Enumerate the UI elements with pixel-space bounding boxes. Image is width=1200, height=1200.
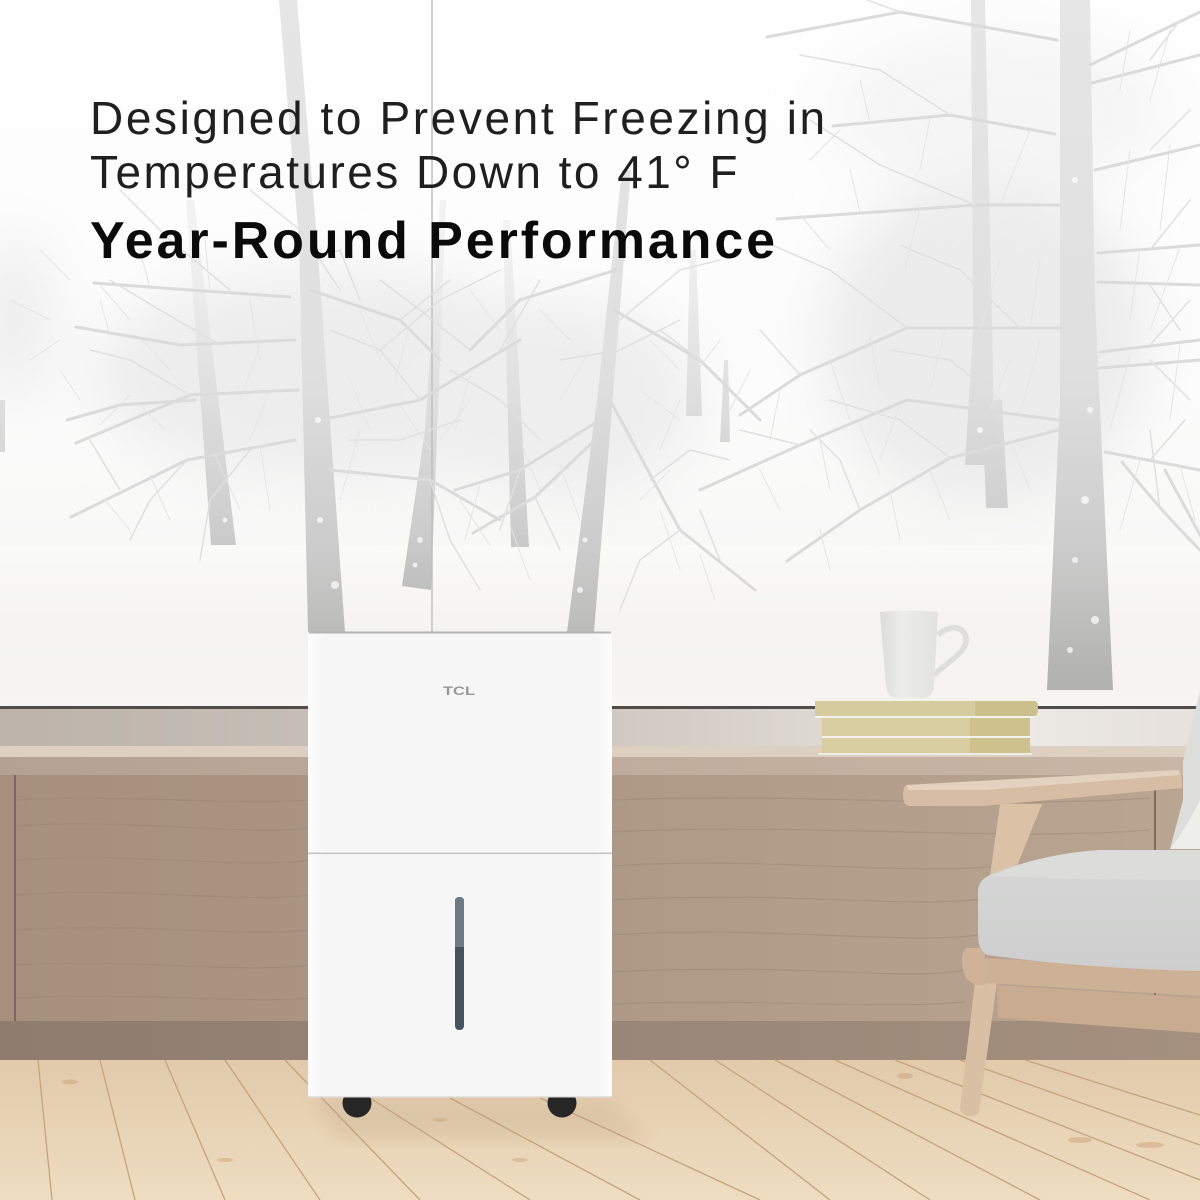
fine twigs [10, 30, 1195, 600]
bold headline: Year-Round Performance [90, 212, 778, 270]
wheels [342, 1088, 372, 1118]
heading line 1: Designed to Prevent Freezing in [90, 92, 828, 144]
trunk: left tree [186, 200, 236, 545]
falling snow dots [222, 177, 1099, 653]
wood floor [0, 1060, 1200, 1200]
trunk: middle back tree [503, 220, 529, 547]
trunk: main right tree [1047, 0, 1113, 690]
body [308, 633, 612, 1097]
wood panel seams [14, 775, 16, 1021]
secondary branches [90, 0, 1190, 610]
trunk: second right tree [965, 0, 995, 465]
wood grain [16, 798, 1150, 1005]
seat cushion [978, 850, 1200, 971]
window sill [0, 709, 1200, 746]
arm rest [903, 770, 1182, 806]
lower rail [997, 985, 1200, 1033]
heading line 2: Temperatures Down to 41° F [90, 146, 740, 198]
TCL logo: TCL [443, 684, 475, 698]
wall base [0, 1021, 1200, 1060]
coffee mug [880, 610, 966, 698]
trunk: centre tree pair [402, 200, 446, 590]
window background: snowy ground [0, 545, 1200, 707]
shadow under dehumidifier [310, 1098, 650, 1140]
window background: snowy sky [0, 0, 1200, 545]
armchair [903, 691, 1200, 1116]
arm post [990, 804, 1042, 876]
water level window [455, 897, 464, 1030]
wood wall panel [0, 775, 1200, 1022]
window mullion [431, 0, 433, 632]
window frame [0, 706, 1200, 709]
distant trunks [0, 250, 1008, 508]
floor planks [38, 1060, 1200, 1200]
tree crown haze [0, 30, 1170, 505]
seat rail [985, 958, 1200, 996]
floor knots [62, 1073, 1164, 1162]
leg [960, 982, 997, 1116]
winter trees [0, 0, 1200, 690]
book stack [812, 698, 1040, 755]
back cushion [1170, 691, 1200, 849]
dehumidifier [308, 632, 612, 1118]
trunk: centre left tree [279, 0, 345, 632]
trunk: centre right tree [567, 170, 631, 632]
main branches [67, 12, 1200, 590]
wooden ledge top [0, 746, 1200, 757]
